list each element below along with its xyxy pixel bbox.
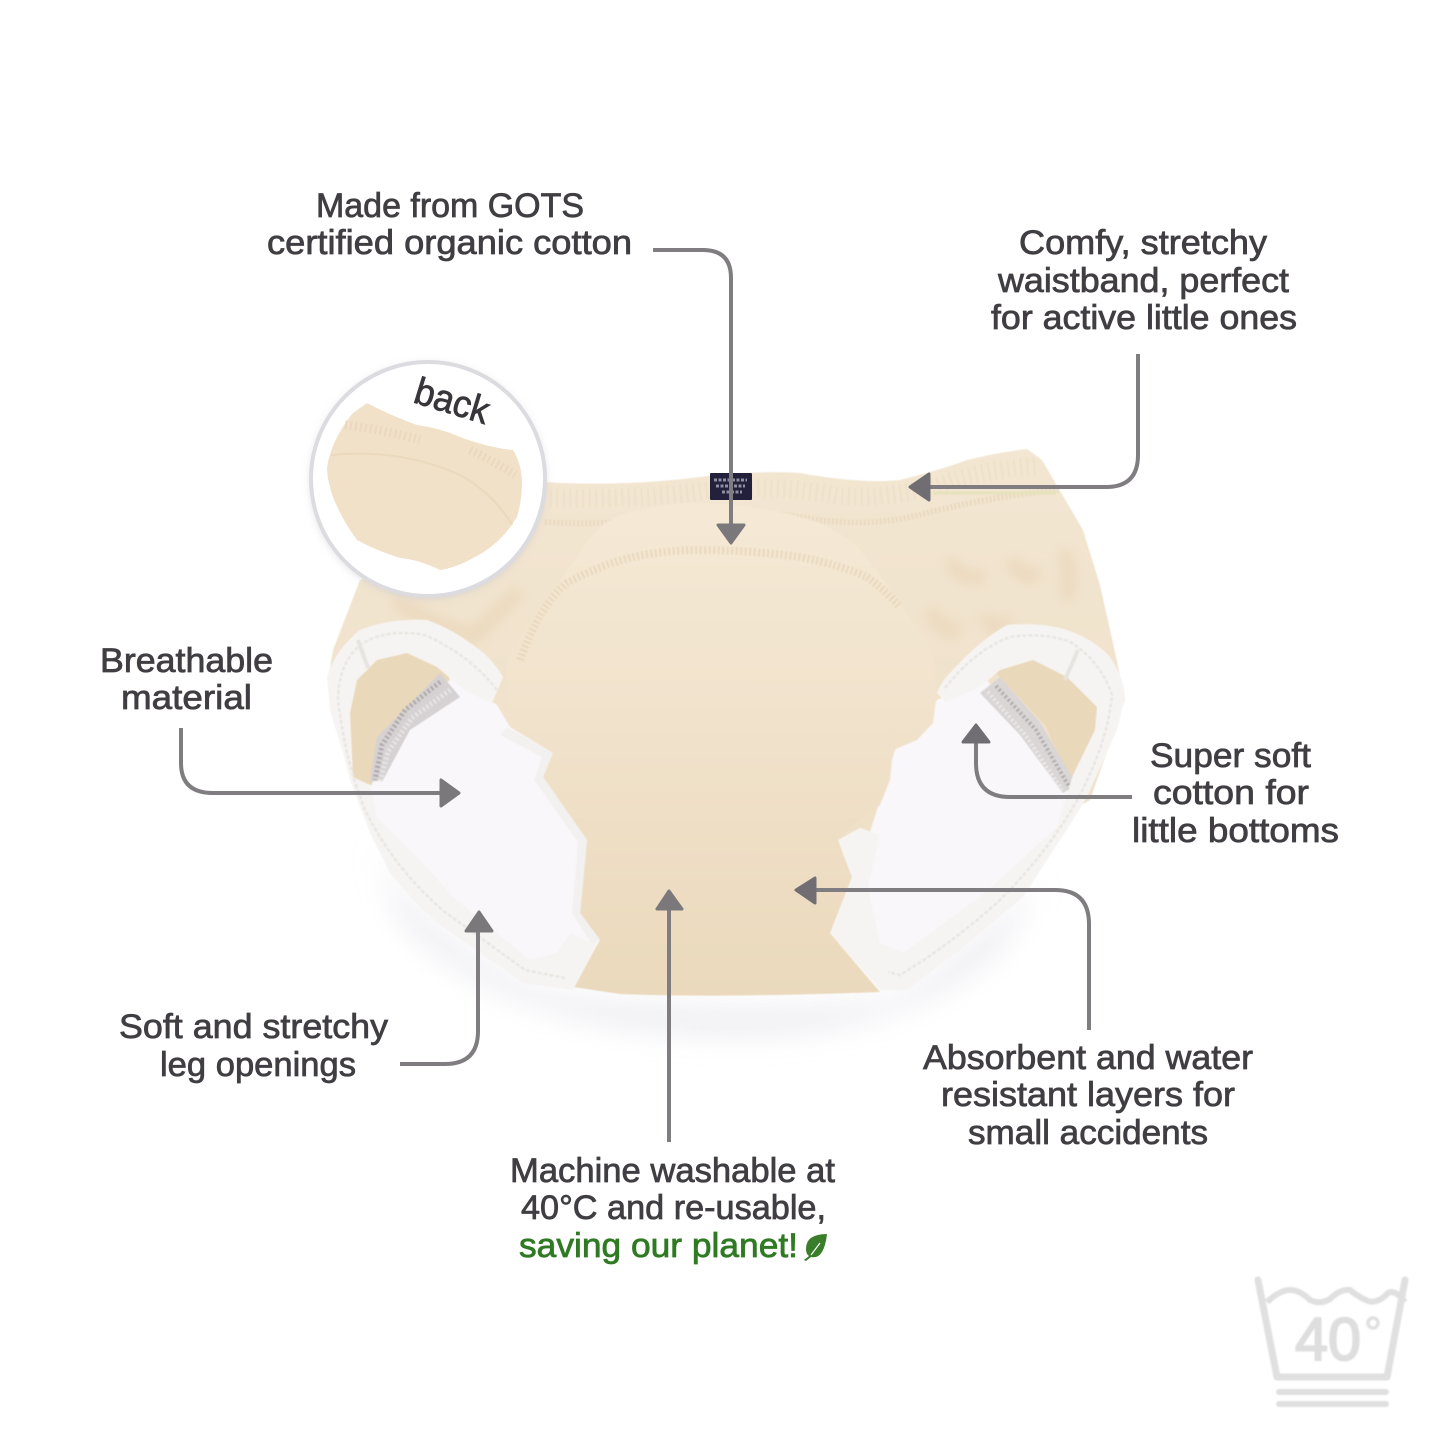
back label: back xyxy=(409,370,495,433)
waistband ribs xyxy=(550,466,1038,498)
elastic seam mark xyxy=(1065,650,1078,680)
text: leg openings xyxy=(119,1008,388,1084)
text: super soft cotton: little bottoms xyxy=(1132,812,1339,850)
right leg hole interior xyxy=(995,655,1100,785)
text: super soft cotton xyxy=(1132,737,1339,850)
text: GOTS organic cotton xyxy=(267,187,632,262)
back garment ribs xyxy=(345,425,515,475)
fabric folds xyxy=(395,550,1069,640)
left white inner panel xyxy=(360,670,600,985)
text: leg openings: leg openings xyxy=(160,1046,356,1084)
text: breathable material xyxy=(100,642,273,717)
text: super soft cotton: Super soft xyxy=(1150,737,1312,775)
text: waistband: Comfy, stretchy xyxy=(1019,224,1267,262)
text: leg openings: Soft and stretchy xyxy=(119,1008,388,1046)
text: absorbent layers: small accidents xyxy=(968,1114,1208,1152)
right white inner panel xyxy=(855,678,1080,965)
left elastic stitching xyxy=(338,633,565,978)
back layer and waistband xyxy=(328,449,1125,850)
arrow: machine washable xyxy=(657,891,682,1142)
inset shadow xyxy=(310,363,546,599)
soft ground shadow xyxy=(372,840,1040,1035)
arrow: super soft cotton xyxy=(963,725,1132,797)
arrow: waistband xyxy=(910,354,1138,500)
right stitching band xyxy=(980,677,1077,793)
text: absorbent layers xyxy=(923,1039,1253,1152)
icon: 40 degree wash symbol: 40 xyxy=(1295,1306,1361,1373)
text: waistband: for active little ones xyxy=(991,299,1297,337)
icon: leaf xyxy=(804,1234,827,1261)
text: GOTS organic cotton: Made from GOTS xyxy=(316,187,584,225)
text: breathable material: Breathable xyxy=(100,642,273,680)
arrow: breathable material xyxy=(181,728,459,806)
left leg elastic xyxy=(327,620,597,990)
brand tag xyxy=(710,473,752,500)
left stitching band xyxy=(370,673,460,782)
arrow: GOTS organic cotton xyxy=(653,250,744,543)
text: machine washable xyxy=(510,1152,836,1265)
pale stitched edge beside the pad xyxy=(500,727,600,945)
icon: 40 degree wash symbol xyxy=(1258,1280,1405,1404)
arrow: leg openings xyxy=(400,912,492,1064)
text: super soft cotton: cotton for xyxy=(1153,774,1309,812)
text: absorbent layers: Absorbent and water xyxy=(923,1039,1253,1077)
front absorbent pad xyxy=(507,503,937,996)
arrow: absorbent layers xyxy=(796,878,1089,1030)
pad stitching xyxy=(520,550,900,660)
training pants garment xyxy=(327,449,1125,1035)
right leg elastic xyxy=(830,624,1125,990)
left leg hole interior xyxy=(345,648,450,785)
text: GOTS organic cotton: certified organic cotton xyxy=(267,224,632,262)
back garment seam xyxy=(331,454,512,525)
waistband stitching xyxy=(545,490,1058,523)
inset circle xyxy=(311,362,545,596)
inset: back view xyxy=(310,362,546,599)
text: machine washable: Machine washable at xyxy=(510,1152,836,1190)
text: breathable material: material xyxy=(121,679,252,717)
right elastic stitching xyxy=(888,635,1112,975)
text: waistband xyxy=(991,224,1297,337)
elastic seam mark left xyxy=(358,640,368,668)
text: absorbent layers: resistant layers for xyxy=(941,1076,1235,1114)
text: machine washable: 40°C and re-usable, xyxy=(521,1189,826,1227)
text: machine washable: saving our planet! xyxy=(519,1227,798,1265)
text: waistband: waistband, perfect xyxy=(997,262,1290,300)
back garment xyxy=(327,403,522,570)
waistband tint line xyxy=(933,492,1056,494)
